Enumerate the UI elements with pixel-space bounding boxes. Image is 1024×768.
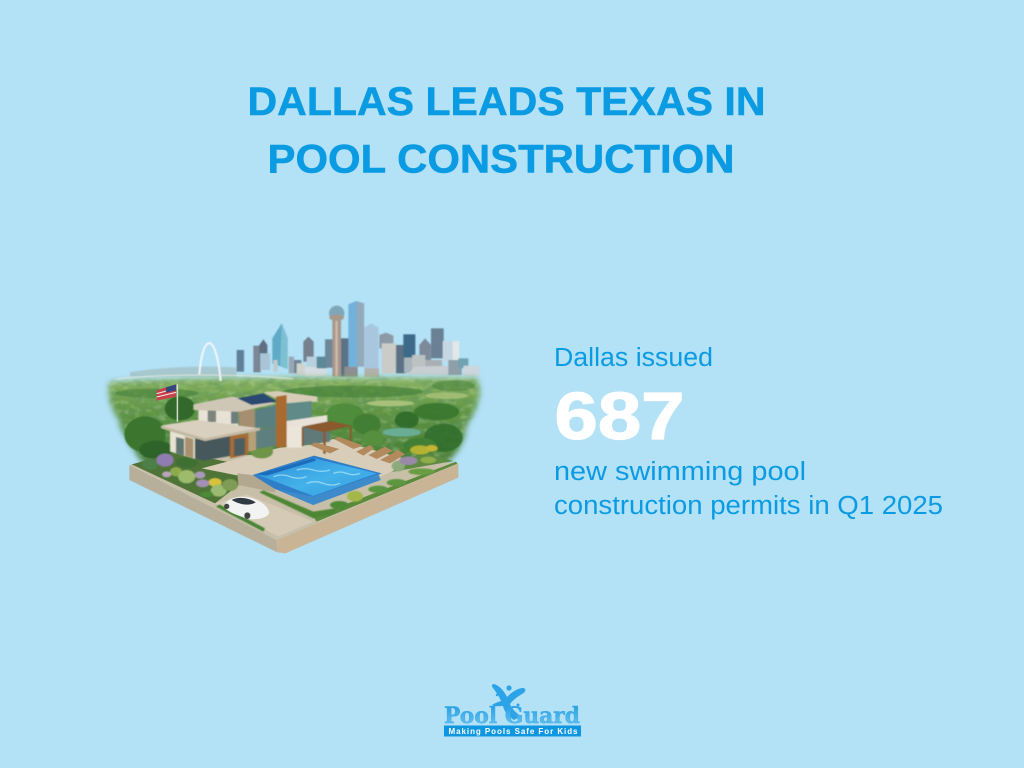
title [248,80,766,182]
illustration: Dallas skyline and pool home [109,301,479,553]
wordmark: Pool Guard [444,703,580,729]
white sports car [224,497,269,519]
sun loungers [310,437,405,463]
stat description: new swimming pool [554,458,806,486]
stat number: 687 [554,379,684,454]
title: POOL CONSTRUCTION [268,138,734,182]
arch and highway [117,343,293,381]
platform base [129,452,458,553]
parkland foliage [109,343,479,463]
stat lead-in: Dallas issued [554,344,713,372]
logo: Pool Guard [444,684,581,736]
american flag [157,384,178,422]
patio and driveway [202,439,405,537]
modern house [161,391,352,461]
stat description [554,458,943,520]
icon: water splash [492,684,525,720]
title: DALLAS LEADS TEXAS IN [248,80,766,124]
skyline [130,301,479,377]
stat text block [554,344,943,520]
tagline bar: Making Pools Safe For Kids [448,727,578,736]
stat description: construction permits in Q1 2025 [554,492,943,520]
swimming pool [253,456,382,505]
garden beds [142,445,436,532]
